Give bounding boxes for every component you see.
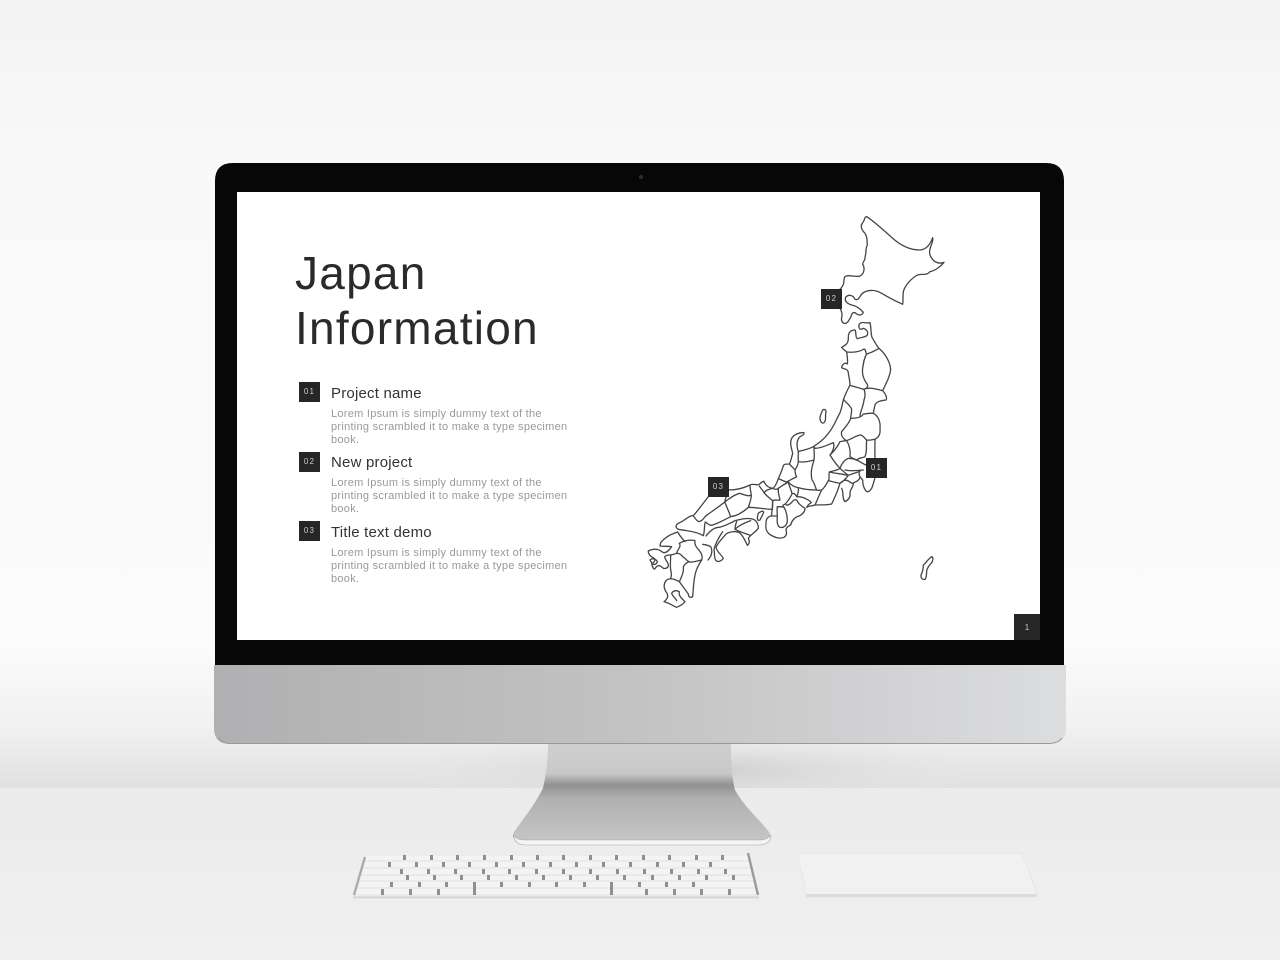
list item 02: 02	[304, 457, 315, 466]
list item 03: Title text demo	[331, 524, 432, 541]
list item 02: printing scrambled it to make a type specimen	[331, 490, 567, 502]
list item 01: printing scrambled it to make a type specimen	[331, 421, 567, 433]
list item 03	[299, 521, 567, 585]
page number: 1	[1025, 623, 1029, 632]
map marker 02: 02	[826, 294, 837, 303]
title: Information	[295, 302, 539, 354]
slide screen	[237, 192, 1040, 640]
map marker 01	[866, 458, 887, 478]
list item 01: Project name	[331, 385, 422, 402]
map marker 03	[708, 477, 729, 497]
list item 02: book.	[331, 503, 359, 515]
list item 03: Lorem Ipsum is simply dummy text of the	[331, 547, 542, 559]
list item 01	[299, 382, 567, 446]
list item 01: Lorem Ipsum is simply dummy text of the	[331, 408, 542, 420]
title: Japan	[295, 247, 427, 299]
list item 01: book.	[331, 434, 359, 446]
page number	[1014, 614, 1040, 640]
map of Japan	[648, 216, 945, 608]
title	[295, 247, 539, 354]
list item 01: 01	[304, 387, 315, 396]
list item 03: book.	[331, 573, 359, 585]
list item 02: Lorem Ipsum is simply dummy text of the	[331, 477, 542, 489]
list item 03: printing scrambled it to make a type specimen	[331, 560, 567, 572]
list item 03: 03	[304, 526, 315, 535]
list item 02: New project	[331, 454, 412, 471]
map marker 03: 03	[713, 482, 724, 491]
map marker 02	[821, 289, 842, 309]
map marker 01: 01	[871, 463, 882, 472]
list item 02	[299, 452, 567, 515]
